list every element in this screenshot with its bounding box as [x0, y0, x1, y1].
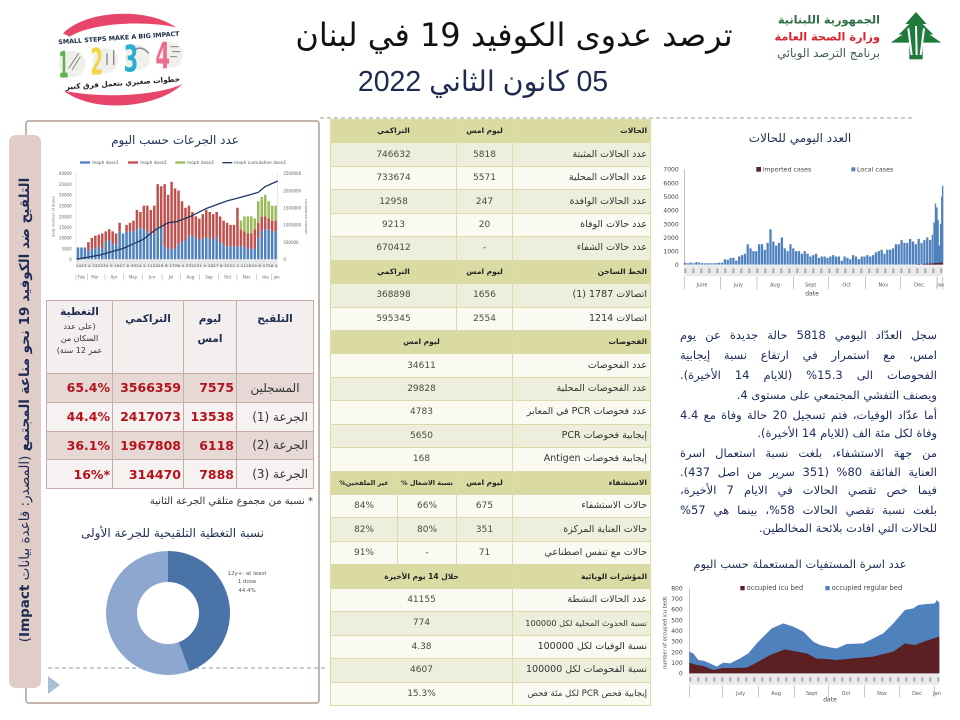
- table: cases tests hospital indicators: ليوم امس: [466, 478, 503, 487]
- table: vaccination totals: التراكمي: [125, 313, 171, 325]
- chart: daily cases: Sept: [805, 282, 816, 288]
- table: cases tests hospital indicators: 675: [476, 501, 493, 511]
- text block: daily summary: أما عدّاد الوفيات، فتم تسجيل 20 حالة وفاة مع 4.4: [680, 408, 937, 422]
- donut label: 44.4%: [238, 588, 256, 594]
- text block: daily summary: بلغت نسبة تقصي الحالات 58%، بينما هي 57%: [680, 503, 937, 517]
- table: cases tests hospital indicators: عدد الحالات المحلية: [569, 172, 647, 183]
- table: vaccination totals: 16%*: [74, 467, 110, 482]
- table: vaccination totals: 2417073: [120, 409, 181, 424]
- table: cases tests hospital indicators: 80%: [417, 525, 437, 535]
- chart: daily cases: Aug: [770, 282, 780, 288]
- text block: daily summary: امس، مع استمرار في ارتفاع نسبة إيجابية: [680, 348, 937, 362]
- table: vaccination totals: عمر 12 سنة): [57, 346, 102, 355]
- table: cases tests hospital indicators: 247: [476, 197, 493, 207]
- text block: daily summary: [680, 328, 937, 535]
- axes: 30000: [59, 193, 72, 198]
- table: vaccination totals: التلقيح: [257, 313, 293, 325]
- y axis: [663, 166, 679, 269]
- text block: daily summary: سجل العدّاد اليومي 5818 حالة جديدة عن يوم: [680, 328, 937, 342]
- table: cases tests hospital indicators: 2554: [473, 314, 496, 324]
- local case bars: [685, 186, 943, 265]
- regular bed area: [689, 600, 939, 673]
- chart: coverage donut: [106, 551, 267, 675]
- table: vaccination totals: (على عدد: [63, 322, 96, 331]
- chart: daily cases: July: [733, 282, 743, 288]
- y axis: [671, 585, 683, 678]
- table: cases tests hospital indicators: 91%: [354, 548, 374, 558]
- text block: daily summary: فيما خص تقصي الحالات في الايام 7 الأخيرة،: [680, 483, 937, 497]
- table: vaccination totals: 7575: [199, 380, 234, 395]
- y axis: 2000: [663, 235, 679, 242]
- table: cases tests hospital indicators: % نسبة الاشغال: [401, 479, 453, 487]
- logo: small steps make a big impact: 4: [155, 35, 170, 78]
- table: cases tests hospital indicators: إيجابية فحوصات Antigen: [544, 453, 647, 464]
- y axis: 500: [671, 617, 683, 624]
- chart: occupied hospital beds: number of occupied icu beds: [663, 596, 669, 669]
- table: cases tests hospital indicators: 15.3%: [407, 689, 436, 699]
- axes: 1500000: [283, 205, 302, 210]
- y axis: 600: [671, 607, 683, 614]
- chart: daily cases: Jan: [935, 282, 944, 288]
- table: cases tests hospital indicators: 29828: [407, 384, 436, 394]
- legend: occupied icu bed: [747, 584, 803, 592]
- text block: daily summary: العناية الفائقة 80% (351 سرير من اصل 437).: [680, 465, 937, 479]
- table: vaccination totals: الجرعة (2): [252, 438, 308, 452]
- text block: daily summary: من جهة الاستشفاء، بلغت نسبة استعمال اسرة: [680, 446, 937, 460]
- table: cases tests hospital indicators: عدد الحالات المثبتة: [572, 149, 647, 160]
- axes: 2500000: [283, 171, 302, 176]
- legend: moph dose3: [187, 160, 214, 166]
- legend: occupied regular bed: [832, 584, 902, 592]
- chart: daily cases: [663, 166, 944, 297]
- table: cases tests hospital indicators: 4607: [410, 665, 433, 675]
- table: cases tests hospital indicators: اتصالات 1787 (1): [573, 289, 647, 300]
- table: cases tests hospital indicators: ليوم امس: [466, 126, 503, 135]
- logo: small steps make a big impact: [58, 14, 183, 106]
- chart: daily vaccine doses: [51, 160, 307, 281]
- y axis: 300: [671, 639, 683, 646]
- table: vaccination totals: 1967808: [120, 438, 181, 453]
- divider: [48, 668, 325, 669]
- table: cases tests hospital indicators: خلال 14 يوم الأخيرة: [384, 572, 459, 581]
- table: cases tests hospital indicators: 5650: [410, 431, 433, 441]
- table: cases tests hospital indicators: عدد حالات الشفاء: [577, 242, 647, 253]
- y axis: 1000: [663, 248, 679, 255]
- table: cases tests hospital indicators: -: [425, 548, 429, 558]
- table: vaccination totals: ليوم: [199, 313, 221, 325]
- axes: 10000: [59, 236, 72, 241]
- date axis: [76, 260, 278, 267]
- table: cases tests hospital indicators: 774: [413, 618, 430, 628]
- axes: 2000000: [283, 188, 302, 193]
- logo: small steps make a big impact: SMALL STEPS MAKE A BIG IMPACT: [58, 31, 180, 46]
- table: cases tests hospital indicators: عدد الحالات الوافدة: [570, 196, 647, 207]
- chart title: hospital beds: عدد اسرة المستفيات المستعملة حسب اليوم: [693, 557, 907, 571]
- chart title: coverage: نسبة التغطية التلقيحية للجرعة الأولى: [81, 526, 264, 540]
- axes: 1000000: [283, 223, 302, 228]
- text block: daily summary: وفاة لكل مئة الف (للايام 14 الأخيرة).: [757, 426, 937, 440]
- table: vaccination totals: 44.4%: [67, 409, 110, 424]
- table: cases tests hospital indicators: 670412: [376, 243, 411, 253]
- table: cases tests hospital indicators: الفحوصات: [609, 337, 647, 346]
- table: cases tests hospital indicators: 12958: [379, 197, 408, 207]
- chart: daily vaccine doses: Oct: [224, 275, 232, 280]
- chart: daily vaccine doses: jan: [273, 275, 280, 280]
- table: vaccination totals: 3566359: [120, 380, 181, 395]
- date axis: [684, 265, 943, 276]
- table: cases tests hospital indicators: 20: [479, 220, 490, 230]
- side tab: vaccination heading: [9, 135, 41, 688]
- table: vaccination totals: الجرعة (1): [252, 410, 308, 424]
- chart: occupied hospital beds: Oct: [842, 691, 850, 697]
- chart: daily vaccine doses: Feb: [78, 275, 85, 280]
- chart: daily cases: Oct: [842, 282, 851, 288]
- y axis: 4000: [663, 208, 679, 215]
- table: cases tests hospital indicators: إيجابية فحص PCR لكل مئة فحص: [528, 689, 647, 699]
- y axis: 200: [671, 649, 683, 656]
- footnote: * نسبة من مجموع متلقي الجرعة الثانية: [150, 496, 313, 507]
- table: cases tests hospital indicators: إيجابية فحوصات PCR: [562, 430, 647, 441]
- table: cases tests hospital indicators: %غير الملقحين: [339, 479, 389, 487]
- cumulative line: [77, 181, 278, 259]
- chart: daily vaccine doses: Nov: [243, 275, 251, 280]
- table: cases tests hospital indicators: 41155: [407, 595, 436, 605]
- table: cases tests hospital indicators: [330, 119, 651, 706]
- table: cases tests hospital indicators: 4.38: [411, 642, 432, 652]
- table: cases tests hospital indicators: نسبة الحدوث المحلية لكل 100000: [525, 618, 647, 628]
- axes: 15000: [59, 225, 72, 230]
- chart: daily vaccine doses: dec: [262, 275, 269, 280]
- chart: daily cases: Dec: [914, 282, 924, 288]
- legend: moph dose2: [140, 160, 167, 166]
- axes: 25000: [59, 203, 72, 208]
- icon: cedar tree: [891, 12, 941, 59]
- table: vaccination totals: الجرعة (3): [252, 467, 308, 481]
- legend: [740, 584, 902, 592]
- legend: imported cases: [763, 166, 811, 173]
- date heading: 05 كانون الثاني 2022: [358, 66, 608, 98]
- chart: daily cases: date: [805, 290, 819, 297]
- ministry name: برنامج الترصد الوبائي: [777, 46, 880, 61]
- chart: daily vaccine doses: Jul: [168, 275, 173, 280]
- icu bed area: [689, 637, 939, 673]
- table: cases tests hospital indicators: 9213: [382, 220, 405, 230]
- table: cases tests hospital indicators: نسبة الوفيات لكل 100000: [538, 641, 647, 652]
- ministry name: [774, 13, 880, 61]
- table: vaccination totals: التغطية: [60, 306, 99, 318]
- axes: daily number of doses: [51, 196, 55, 237]
- y axis: 3000: [663, 221, 679, 228]
- table: cases tests hospital indicators: 168: [413, 454, 430, 464]
- ministry name: وزارة الصحة العامة: [774, 29, 880, 43]
- donut label: [227, 571, 267, 594]
- axes: 20000: [59, 214, 72, 219]
- table: vaccination totals: 7888: [199, 467, 234, 482]
- chart: daily vaccine doses: Aug: [186, 275, 195, 280]
- vertical heading text: التلقيح ضد الكوفيد 19 نحو مناعة المجتمع (المصدر: قاعدة بيانات Impact ): [17, 178, 33, 642]
- title: ترصد عدوى الكوفيد 19 في لبنان: [295, 16, 733, 54]
- chart: daily vaccine doses: Sep: [205, 275, 213, 280]
- table: cases tests hospital indicators: المؤشرات الوبائية: [581, 572, 647, 581]
- table: cases tests hospital indicators: اتصالات 1214: [589, 313, 647, 324]
- table: cases tests hospital indicators: الحالات: [620, 126, 647, 135]
- chart: occupied hospital beds: July: [735, 691, 745, 697]
- table: vaccination totals: امس: [198, 333, 222, 345]
- table: cases tests hospital indicators: 34611: [407, 361, 436, 371]
- table: cases tests hospital indicators: 1656: [473, 290, 496, 300]
- ministry name: الجمهورية اللبنانية: [778, 13, 880, 27]
- table: cases tests hospital indicators: الخط الساخن: [598, 267, 647, 276]
- legend: [80, 160, 286, 166]
- y axis: 5000: [663, 194, 679, 201]
- dashed divider: [320, 118, 912, 119]
- axes: 35000: [59, 182, 72, 187]
- y axis: 6000: [663, 180, 679, 187]
- axes: [51, 171, 308, 262]
- table: cases tests hospital indicators: 368898: [376, 290, 411, 300]
- table: vaccination totals: 13538: [190, 409, 234, 424]
- table: cases tests hospital indicators: 595345: [376, 314, 411, 324]
- table: cases tests hospital indicators: 733674: [376, 173, 411, 183]
- y axis: 0: [679, 671, 683, 678]
- stacked bars: [78, 182, 276, 259]
- logo: small steps make a big impact: 3: [124, 37, 138, 80]
- axes: 500000: [283, 240, 299, 245]
- table: cases tests hospital indicators: 746632: [376, 150, 411, 160]
- chart: daily cases: Nov: [878, 282, 888, 288]
- table: cases tests hospital indicators: 84%: [354, 501, 374, 511]
- table: cases tests hospital indicators: 71: [479, 548, 490, 558]
- logo: small steps make a big impact: 2: [90, 41, 103, 84]
- table: cases tests hospital indicators: التراكمي: [377, 267, 410, 276]
- table: vaccination totals: 36.1%: [67, 438, 110, 453]
- y axis: 7000: [663, 166, 679, 173]
- table: vaccination totals: [46, 300, 314, 489]
- panel: vaccination: [25, 120, 320, 704]
- chart title: daily cases: العدد اليومي للحالات: [749, 131, 851, 145]
- table: cases tests hospital indicators: حالات الاستشفاء: [581, 500, 647, 511]
- y axis: 0: [675, 262, 679, 269]
- chart: occupied hospital beds: [662, 584, 941, 704]
- axes: 5000: [61, 246, 72, 251]
- table: cases tests hospital indicators: 351: [476, 525, 493, 535]
- table: cases tests hospital indicators: -: [483, 243, 486, 253]
- table: cases tests hospital indicators: 5818: [473, 150, 496, 160]
- donut label: 1 dose: [238, 579, 257, 585]
- chart title: daily doses: عدد الجرعات حسب اليوم: [111, 133, 239, 147]
- y axis: 700: [671, 596, 683, 603]
- y axis: 100: [671, 660, 683, 667]
- chart: daily vaccine doses: 1423 4 332231 9 1827 6 3524 2 112029 8 1726 4 332231 9 1827 6 3524 2 112029 8 1726 4: [76, 263, 278, 268]
- y axis: 800: [671, 585, 683, 592]
- table: cases tests hospital indicators: عدد فحوصات PCR في المعابر: [527, 406, 647, 417]
- chart: occupied hospital beds: Nov: [877, 691, 887, 697]
- icon: play arrow: [48, 676, 60, 694]
- table: cases tests hospital indicators: عدد الفحوصات: [588, 360, 647, 371]
- table: cases tests hospital indicators: التراكمي: [377, 126, 410, 135]
- axes: 0: [283, 257, 286, 262]
- axes: 40000: [59, 171, 72, 176]
- table: cases tests hospital indicators: 66%: [417, 501, 437, 511]
- logo: ministry of public health: [774, 12, 942, 61]
- chart: occupied hospital beds: Sept: [806, 691, 817, 697]
- chart: daily vaccine doses: Apr: [111, 275, 118, 280]
- table: cases tests hospital indicators: 82%: [354, 525, 374, 535]
- table: cases tests hospital indicators: ليوم امس: [466, 267, 503, 276]
- logo: small steps make a big impact: خطوات صغيري بتعمل فرق كبير: [64, 74, 180, 91]
- donut label: 12y+: at least: [227, 571, 267, 577]
- legend: moph dose1: [92, 160, 119, 166]
- table: vaccination totals: السكان من: [61, 334, 98, 343]
- table: vaccination totals: المسجلين: [250, 381, 300, 395]
- table: cases tests hospital indicators: عدد الفحوصات المحلية: [557, 383, 647, 394]
- table: cases tests hospital indicators: حالات العناية المركزة: [563, 524, 647, 535]
- legend: Local cases: [857, 166, 893, 173]
- table: vaccination totals: 65.4%: [67, 380, 110, 395]
- table: cases tests hospital indicators: ليوم امس: [403, 337, 440, 346]
- table: cases tests hospital indicators: الاستشفاء: [609, 478, 647, 487]
- table: cases tests hospital indicators: حالات مع تنفس اصطناعي: [544, 547, 647, 558]
- imported case bars: [919, 262, 942, 265]
- logo: small steps make a big impact: 1: [59, 43, 69, 86]
- legend: moph cumulative dose1: [234, 160, 286, 166]
- table: vaccination totals: 314470: [129, 467, 181, 482]
- chart: occupied hospital beds: Jan: [932, 691, 941, 697]
- table: cases tests hospital indicators: عدد الحالات النشطة: [567, 594, 647, 605]
- chart: daily vaccine doses: May: [129, 275, 138, 280]
- legend: [756, 166, 893, 173]
- text block: daily summary: الفحوصات الى 15.3% (للايام 14 الأخيرة).: [680, 368, 937, 382]
- table: cases tests hospital indicators: نسبة الفحوصات لكل 100000: [526, 664, 647, 675]
- table: cases tests hospital indicators: عدد حالات الوفاة: [580, 219, 647, 230]
- chart: occupied hospital beds: date: [823, 697, 837, 704]
- chart: daily cases: June: [696, 282, 707, 288]
- text block: daily summary: للحالات التي افادت بلائحة المخالطين.: [759, 521, 937, 535]
- y axis: 400: [671, 628, 683, 635]
- table: cases tests hospital indicators: 5571: [473, 173, 496, 183]
- chart: daily vaccine doses: Jun: [148, 275, 156, 280]
- text block: daily summary: ويصنف التفشي المجتمعي على مستوى 4.: [737, 388, 937, 402]
- chart: daily vaccine doses: Mar: [91, 275, 99, 280]
- table: cases tests hospital indicators: 4783: [410, 407, 433, 417]
- axes: 0: [69, 257, 72, 262]
- date axis: [689, 674, 939, 685]
- chart: occupied hospital beds: Aug: [771, 691, 781, 697]
- table: vaccination totals: 6118: [199, 438, 234, 453]
- chart: occupied hospital beds: Dec: [912, 691, 922, 697]
